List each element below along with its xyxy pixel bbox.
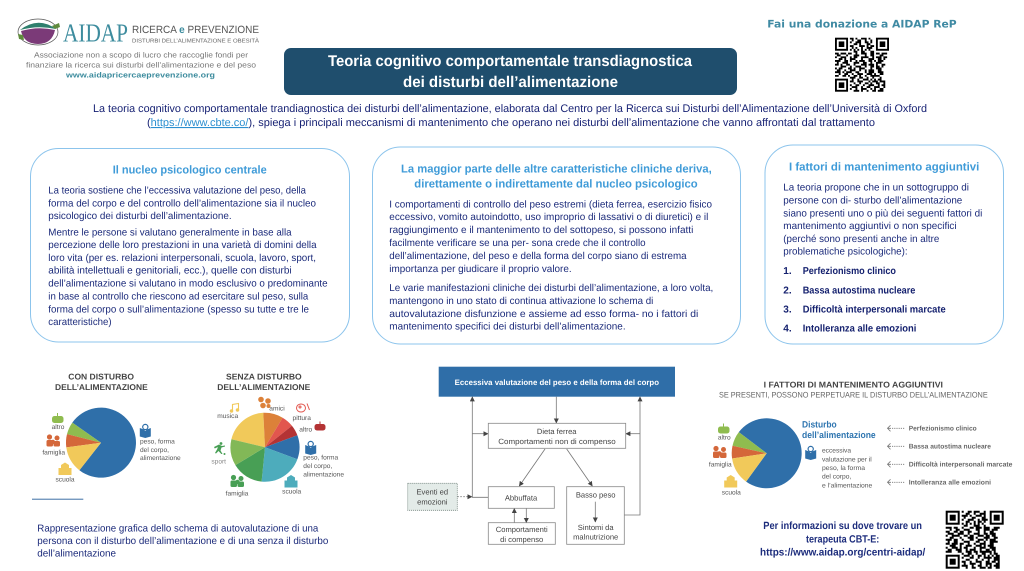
label: peso, forma — [140, 439, 181, 462]
flow box: comportamenti di compenso: Comportamenti — [496, 525, 548, 534]
flow box: eventi ed emozioni: Eventi ed — [416, 488, 448, 497]
icon: book — [805, 446, 816, 460]
label: peso, forma: peso, forma — [140, 439, 175, 446]
flow box: comportamenti di compenso — [488, 523, 555, 544]
flow box: dieta ferrea: Dieta ferrea — [537, 427, 577, 436]
text block: eccessiva valutazione: eccessiva — [822, 448, 851, 455]
text block: nucleo: percezione delle loro prestazioni in una varietà di domini della — [48, 240, 317, 251]
icon: school — [724, 475, 737, 488]
text block: altre caratteristiche: dell’alimentazione, del peso e della forma del corpo siano di estrema — [389, 251, 687, 262]
label: altro: altro — [299, 426, 312, 433]
panel: il nucleo psicologico centrale — [30, 148, 350, 342]
logo: AIDAP Ricerca e Prevenzione: www.aidapricercaeprevenzione.org — [65, 70, 215, 79]
text block: nucleo: psicologico dei disturbi dell’alimentazione. — [48, 211, 232, 222]
icon: bowl logo — [18, 19, 60, 45]
flow box: basso peso: Sintomi da — [578, 523, 614, 532]
label: musica: musica — [217, 413, 238, 420]
text block: eccessiva valutazione — [822, 448, 873, 489]
heading: senza disturbo: DELL’ALIMENTAZIONE — [217, 382, 311, 392]
label: famiglia: famiglia — [226, 490, 249, 497]
caption: rappresentazione grafica: Rappresentazione grafica dello schema di autovalutazione di una — [37, 524, 319, 535]
icon: family green — [230, 475, 244, 487]
caption: rappresentazione grafica: persona con il disturbo dell’alimentazione e di una senza il disturbo — [37, 536, 329, 547]
text block: fattori: siano presenti uno o più dei seguenti fattori di — [783, 208, 982, 219]
icon: football player — [214, 442, 226, 455]
logo: AIDAP Ricerca e Prevenzione — [18, 19, 259, 79]
icon: book — [140, 424, 151, 438]
text block: nucleo: loro vita (per es. relazioni interpersonali, scuola, lavoro, sport, — [48, 253, 316, 264]
heading: disturbo dell'alimentazione — [802, 419, 876, 440]
text block: altre caratteristiche: facilmente verificare se una per- sona crede che il controllo — [389, 238, 646, 249]
heading: fattori: I fattori di mantenimento aggiuntivi — [789, 162, 979, 174]
label: pittura: pittura — [293, 415, 311, 422]
factors list with arrows: Difficoltà interpersonali marcate — [909, 461, 1013, 468]
label: peso, forma — [303, 455, 344, 478]
flow box: dieta ferrea — [488, 423, 626, 448]
label: peso, forma: alimentazione — [303, 472, 344, 478]
divider line — [32, 499, 83, 500]
label: sport: sport — [211, 459, 226, 466]
chart: senza disturbo dell'alimentazione — [211, 371, 344, 497]
flow box: dieta ferrea: Comportamenti non di compenso — [498, 437, 616, 446]
heading: fattori chart: SE PRESENTI, POSSONO PERPETUARE IL DISTURBO DELL’ALIMENTAZIONE — [719, 390, 988, 399]
callout: dove trovare un terapeuta: https://www.aidap.org/centri-aidap/ — [760, 547, 925, 559]
panel: fattori di mantenimento aggiuntivi — [765, 145, 1004, 344]
logo: AIDAP Ricerca e Prevenzione: Associazione non a scopo di lucro che raccoglie fondi per — [34, 51, 249, 60]
text block: fattori: (perché sono presenti anche in altre — [783, 234, 940, 245]
icon: music — [230, 404, 239, 412]
text block: eccessiva valutazione: e l’alimentazione — [822, 482, 873, 489]
label: famiglia: famiglia — [42, 450, 65, 457]
heading: con disturbo: DELL’ALIMENTAZIONE — [55, 382, 148, 392]
text block: nucleo: La teoria sostiene che l’eccessiva valutazione del peso, della — [48, 186, 306, 197]
text block: altre caratteristiche: mantengono in uno stato di continua attivazione lo schema di — [389, 296, 653, 307]
text block: altre caratteristiche: raggiungimento e il mantenimento to del sottopeso, si possono infatti — [389, 225, 693, 236]
numbered list: fattori: 1. — [783, 266, 792, 277]
title banner: dei disturbi dell’alimentazione — [403, 74, 618, 91]
text block: fattori — [783, 183, 982, 258]
text block: eccessiva valutazione: del corpo, — [822, 474, 851, 481]
intro paragraph: (https://www.cbte.co/), spiega i principali meccanismi di mantenimento che operano nei disturbi dell’alimentazione che vanno affrontati dal trattamento — [147, 117, 875, 129]
icon: friends — [258, 397, 271, 408]
label: scuola: scuola — [722, 490, 741, 497]
heading: altre caratteristiche: La maggior parte delle altre caratteristiche cliniche deriva, — [401, 163, 712, 175]
flow box: abbuffata — [488, 487, 554, 508]
label: scuola: scuola — [55, 477, 75, 484]
pie chart: con disturbo — [66, 408, 136, 478]
title banner — [284, 48, 737, 95]
heading: fattori chart — [719, 379, 988, 399]
heading: senza disturbo: SENZA DISTURBO — [226, 371, 302, 381]
label: amici: amici — [269, 405, 285, 412]
label: peso, forma: del corpo, — [140, 447, 169, 454]
flow box: eventi ed emozioni — [408, 483, 457, 510]
label: peso, forma: peso, forma — [303, 455, 338, 462]
text block: nucleo — [48, 186, 328, 328]
text block: altre caratteristiche: autovalutazione disfunzione e assieme ad esso forma- no i fattori di — [389, 309, 698, 320]
icon: school — [58, 462, 72, 475]
intro paragraph: La teoria cognitivo comportamentale trandiagnostica dei disturbi dell’alimentazione, elaborata dal Centro per la Ricerca sui Disturbi dell’Alimentazione dell’Università di Oxford — [93, 103, 927, 115]
numbered list: fattori: 3. — [783, 305, 792, 316]
text block: nucleo: forma del corpo e del controllo dell’alimentazione sia il nucleo — [48, 198, 316, 209]
heading: disturbo dell'alimentazione: Disturbo — [802, 419, 837, 429]
factors list with arrows — [888, 425, 1013, 486]
callout: dove trovare un terapeuta — [760, 520, 925, 559]
icon: controller — [52, 413, 64, 423]
text block: eccessiva valutazione: valutazione per il — [822, 456, 872, 463]
numbered list: fattori: 4. — [783, 324, 792, 335]
label: altro: altro — [718, 435, 731, 442]
numbered list: fattori: Perfezionismo clinico — [803, 266, 896, 277]
numbered list: fattori: Bassa autostima nucleare — [803, 285, 916, 296]
flow box: eventi ed emozioni: emozioni — [417, 497, 448, 506]
text block: nucleo: Mentre le persone si valutano generalmente in base alla — [48, 227, 292, 238]
label: peso, forma: alimentazione — [140, 455, 181, 462]
logo: AIDAP Ricerca e Prevenzione: finanziare la ricerca sui disturbi dell’alimentazione e del peso — [26, 61, 256, 70]
text block: altre caratteristiche — [389, 199, 713, 333]
text block: altre caratteristiche: mantenimento specifici dei disturbi dell’alimentazione. — [389, 322, 626, 333]
caption: rappresentazione grafica: dell’alimentazione — [37, 549, 116, 560]
logo: AIDAP Ricerca e Prevenzione: RICERCA e PREVENZIONE — [132, 24, 259, 36]
text block: fattori: persone con di- sturbo dell’alimentazione — [783, 195, 963, 206]
icon: book — [305, 441, 316, 455]
heading: fattori chart: I FATTORI DI MANTENIMENTO AGGIUNTIVI — [764, 379, 943, 389]
icon: painting — [296, 404, 310, 412]
callout: dove trovare un terapeuta: Per informazioni su dove trovare un — [763, 520, 922, 532]
flow box: basso peso: Basso peso — [576, 491, 616, 500]
flow box: abbuffata: Abbuffata — [505, 493, 538, 502]
QR code: donation — [835, 39, 888, 91]
factors list with arrows: Intolleranza alle emozioni — [909, 479, 991, 486]
icon: controller — [718, 424, 730, 434]
text block: eccessiva valutazione: peso, la forma — [822, 465, 865, 472]
factors list with arrows: Perfezionismo clinico — [909, 425, 977, 432]
donation call to action: Fai una donazione a AIDAP ReP — [767, 19, 957, 31]
numbered list: fattori: Intolleranza alle emozioni — [803, 324, 917, 335]
heading: disturbo dell'alimentazione: dell’alimentazione — [802, 430, 876, 440]
donation call to action — [767, 19, 957, 91]
panel: altre caratteristiche cliniche — [372, 147, 740, 344]
flowchart: schema transdiagnostico — [408, 367, 675, 544]
text block: fattori: mantenimento aggiuntivi o non specifici — [783, 221, 957, 232]
chart: i fattori di mantenimento aggiuntivi — [709, 379, 1013, 497]
heading: altre caratteristiche — [401, 163, 712, 190]
heading: con disturbo — [55, 371, 148, 392]
flow box: comportamenti di compenso: di compenso — [500, 535, 543, 544]
QR code: centri AIDAP — [946, 512, 1003, 568]
text block: nucleo: abilità intellettuali e genitoriali, ecc.), quelle con disturbi — [48, 266, 292, 277]
heading: senza disturbo — [217, 371, 311, 392]
pie chart: fattori — [732, 418, 802, 488]
numbered list: fattori: 2. — [783, 285, 792, 296]
text block: altre caratteristiche: I comportamenti di controllo del peso estremi (dieta ferrea, esercizio fisico — [389, 199, 712, 210]
heading: con disturbo: CON DISTURBO — [68, 371, 134, 381]
logo: AIDAP Ricerca e Prevenzione: DISTURBI DELL’ALIMENTAZIONE E OBESITÀ — [132, 37, 259, 44]
icon: school teal — [284, 475, 298, 488]
label: peso, forma: del corpo, — [303, 463, 332, 470]
label: famiglia: famiglia — [709, 462, 732, 469]
numbered list: fattori — [783, 266, 946, 335]
numbered list: fattori: Difficoltà interpersonali marcate — [803, 305, 946, 316]
icon: controller red — [314, 422, 326, 430]
heading: altre caratteristiche: direttamente o indirettamente dal nucleo psicologico — [414, 178, 698, 190]
flow box: eccessiva valutazione — [439, 367, 675, 397]
text block: fattori: problematiche psicologiche): — [783, 247, 908, 258]
text block: fattori: La teoria propone che in un sottogruppo di — [783, 183, 969, 194]
caption: rappresentazione grafica — [37, 524, 329, 560]
text block: nucleo: dell’alimentazione si valutano in modo esclusivo o predominante — [48, 278, 328, 289]
text block: nucleo: forma del corpo o sull’alimentazione (spesso su tutte e tre le — [48, 304, 309, 315]
label: scuola: scuola — [282, 489, 302, 496]
heading: nucleo: Il nucleo psicologico centrale — [113, 165, 267, 177]
label: altro: altro — [52, 424, 65, 431]
logo: AIDAP Ricerca e Prevenzione: AIDAP — [63, 19, 128, 48]
pie chart: senza disturbo — [230, 413, 300, 482]
flow box: basso peso — [567, 487, 624, 544]
chart: con disturbo dell'alimentazione — [42, 371, 181, 484]
flow box: basso peso: malnutrizione — [573, 533, 618, 542]
title banner: Teoria cognitivo comportamentale transdiagnostica — [328, 53, 692, 70]
text block: altre caratteristiche: eccessivo, vomito autoindotto, uso improprio di lassativi o di diuretici) e il — [389, 212, 708, 223]
flow box: eccessiva valutazione: Eccessiva valutazione del peso e della forma del corpo — [455, 378, 659, 387]
text block: altre caratteristiche: Le varie manifestazioni cliniche dei disturbi dell’alimentazione, a loro volta, — [389, 283, 713, 294]
text block: nucleo: in base al controllo che riescono ad esercitare sul peso, sulla — [48, 291, 309, 302]
callout: dove trovare un terapeuta: terapeuta CBT-E: — [806, 534, 879, 546]
text block: altre caratteristiche: importanza per giudicare il proprio valore. — [389, 264, 572, 275]
icon: family — [46, 434, 60, 446]
icon: family — [713, 446, 726, 458]
intro paragraph — [93, 103, 927, 129]
text block: nucleo: caratteristiche) — [48, 317, 112, 328]
factors list with arrows: Bassa autostima nucleare — [909, 443, 991, 450]
arrows: flow connectors — [457, 397, 640, 523]
